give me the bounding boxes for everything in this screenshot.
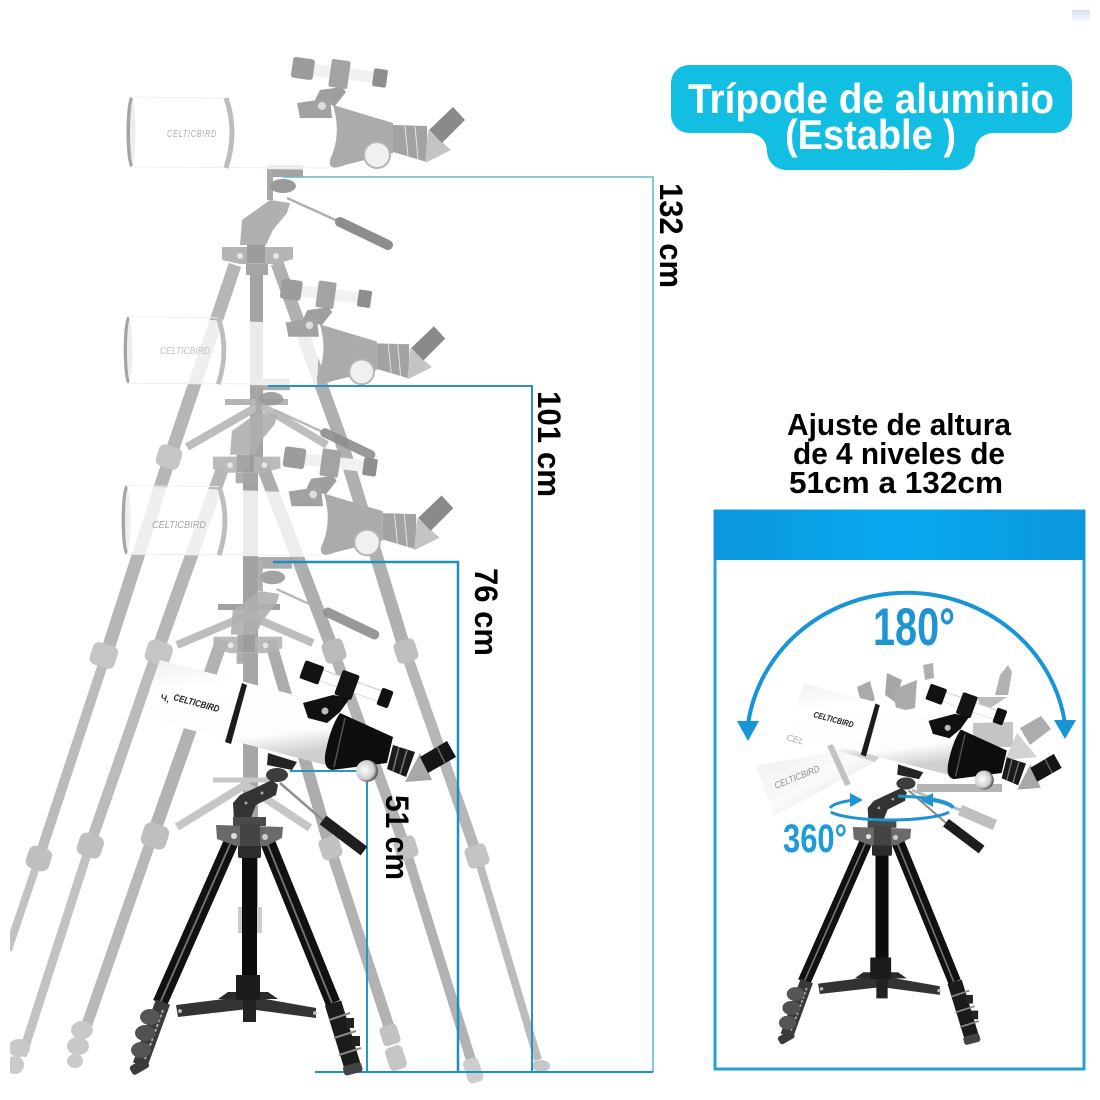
ghost brand text lower: CELTICBIRD [773, 764, 822, 792]
label 101 cm: 101 cm [531, 391, 567, 497]
ghost leg: middle left [6, 470, 222, 1074]
ghost telescope: 101 cm position [124, 278, 445, 386]
ghost spreaders [177, 402, 327, 828]
base line [315, 1071, 653, 1073]
adjustment heading [787, 407, 1012, 500]
heading line 3: 51cm a 132cm [789, 465, 1003, 500]
label 76 cm: 76 cm [468, 568, 504, 656]
ghost telescope: 132 cm position [126, 57, 465, 170]
ghost brand text upper: CEL [785, 732, 805, 746]
brand text: CELTICBIRD [172, 692, 221, 715]
heading line 2: de 4 niveles de [793, 436, 1005, 471]
ghost tripods [6, 262, 550, 1085]
title badge [671, 65, 1072, 170]
panel: rotation range [714, 510, 1085, 1069]
ghost telescope positions [756, 663, 1051, 825]
brand logo: Ч, [159, 692, 171, 704]
panel frame [715, 511, 1084, 1069]
heading line 1: Ajuste de altura [787, 407, 1012, 442]
ghost head: top position [222, 165, 388, 275]
ghost leg: middle right [263, 467, 485, 1085]
180 degree arc arrow [737, 593, 1076, 741]
ghost leg: outer left, highest position [8, 265, 235, 950]
label 132 cm: 132 cm [653, 183, 689, 288]
ghost center columns [238, 262, 263, 933]
ghost head: 76 cm position [213, 557, 374, 664]
telescope on tripod, rotation view [777, 683, 1062, 1045]
title line 1: Trípode de aluminio [688, 75, 1054, 122]
ghost head: 101 cm position [213, 379, 371, 483]
label 51 cm: 51 cm [379, 795, 415, 880]
title line 2: (Estable ) [785, 111, 956, 158]
brand text: CELTICBIRD [812, 709, 855, 730]
51 cm line [290, 771, 367, 1072]
height labels [379, 183, 689, 880]
ghost leg: inner right [270, 640, 408, 1072]
ghost leg: inner left [67, 640, 222, 1068]
76 cm line [273, 562, 458, 1072]
ghost leg: outer right [277, 263, 550, 1072]
360 degree rotation arrows [827, 793, 953, 820]
101 cm line [268, 386, 532, 1072]
label 360 degrees: 360° [783, 817, 847, 861]
decorative corner patch [1072, 10, 1090, 22]
label 180 degrees: 180° [873, 598, 955, 657]
ghost brand text: CELTICBIRD [152, 520, 206, 531]
132 cm line [283, 177, 653, 1072]
height dimension lines [268, 177, 653, 1072]
ghost telescope: 76 cm position [122, 446, 453, 557]
main telescope on tripod [129, 660, 456, 1076]
ghost brand text: CELTICBIRD [160, 346, 210, 357]
panel blue header [714, 510, 1085, 560]
ghost brand text: CELTICBIRD [167, 129, 217, 140]
